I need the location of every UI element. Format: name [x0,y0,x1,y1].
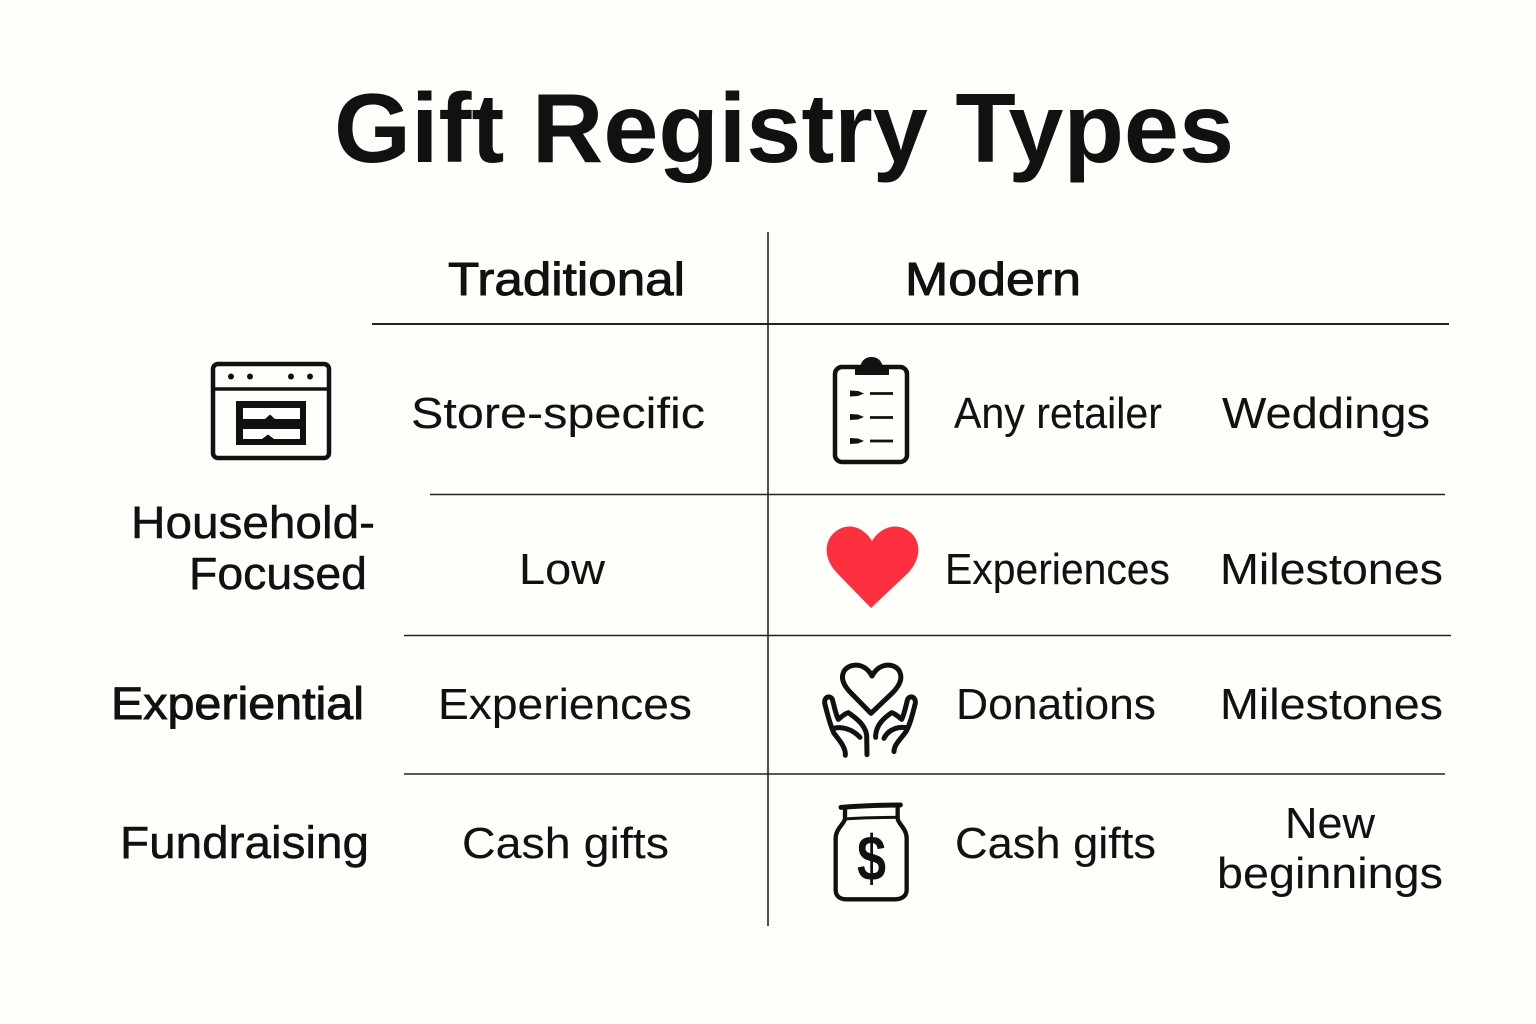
row label: Household-Focused: Household- [131,497,375,548]
title: Gift Registry Types [334,73,1234,183]
cell: Low: Low [519,545,605,594]
row label: Household-Focused [131,497,375,599]
cell: Donations: Donations [956,680,1156,729]
cell: Any retailer: Any retailer [954,389,1162,438]
cell: Milestones row 2: Milestones [1220,545,1443,594]
cell: New beginnings: New [1285,799,1375,848]
column header: Modern: Modern [905,253,1081,305]
icon: clipboard checklist [835,357,907,462]
row label: Fundraising: Fundraising [120,817,369,868]
icon: money jar [836,805,907,899]
icon: money jar: $ [857,822,886,894]
cell: Store-specific: Store-specific [411,389,705,438]
cell: Cash gifts (modern): Cash gifts [955,819,1156,868]
cell: Weddings: Weddings [1222,389,1430,438]
cell: New beginnings [1217,799,1443,898]
cell: Milestones row 3: Milestones [1220,680,1443,729]
cell: Experiences (traditional): Experiences [438,680,692,729]
row label: Experiential: Experiential [111,678,364,729]
cell: New beginnings: beginnings [1217,849,1443,898]
row label: Household-Focused: Focused [189,548,367,599]
icon: red heart [827,526,918,608]
column header: Traditional: Traditional [448,253,685,305]
icon: hands holding heart [825,665,915,755]
table grid lines [372,232,1451,926]
cell: Cash gifts (traditional): Cash gifts [462,819,669,868]
icon: oven [213,364,329,458]
cell: Experiences (modern): Experiences [945,545,1170,594]
